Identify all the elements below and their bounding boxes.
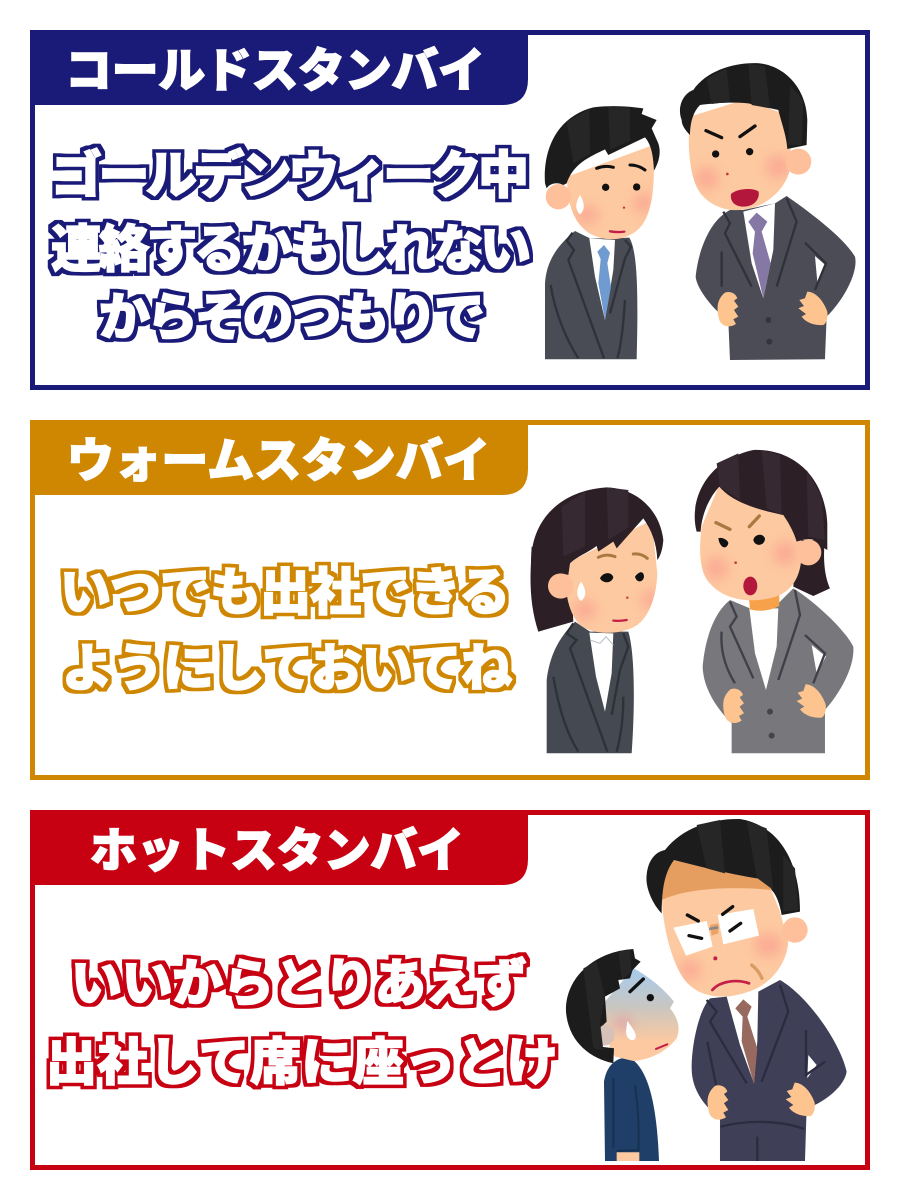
illustration: angry boss man (680, 63, 856, 360)
heading tab: warm standby: ウォームスタンバイ (67, 434, 490, 487)
illustration: small subordinate looking up (566, 949, 679, 1161)
message: cold standby: ゴールデンウィーク中 (51, 147, 529, 204)
message: warm standby (60, 564, 512, 697)
heading tab: cold standby (30, 30, 528, 105)
illustration: subordinate woman with sweat (530, 487, 663, 753)
panel frame: cold (32, 32, 868, 388)
message: warm standby: ようにしておいてね (62, 640, 512, 697)
illustration: angry boss woman (695, 450, 853, 753)
heading tab: hot standby (30, 810, 528, 885)
panel: cold standby (30, 30, 868, 388)
message: cold standby: からそのつもりで (99, 289, 485, 346)
heading tab: hot standby: ホットスタンバイ (90, 824, 464, 877)
panel: warm standby (30, 420, 868, 778)
illustration: angry boss with glasses (646, 819, 847, 1161)
message: hot standby (46, 955, 558, 1091)
message: cold standby: 連絡するかもしれない (51, 221, 531, 278)
message: cold standby (51, 147, 531, 346)
panel frame: warm (32, 422, 868, 778)
heading tab: cold standby: コールドスタンバイ (65, 44, 485, 97)
panel frame: hot (32, 812, 868, 1168)
heading tab: warm standby (30, 420, 528, 495)
message: hot standby: いいからとりあえず (71, 955, 527, 1012)
illustration: subordinate man with sweat (545, 106, 660, 359)
message: hot standby: 出社して席に座っとけ (46, 1034, 558, 1091)
message: warm standby: いつでも出社できる (60, 564, 510, 621)
panel: hot standby (30, 810, 868, 1168)
